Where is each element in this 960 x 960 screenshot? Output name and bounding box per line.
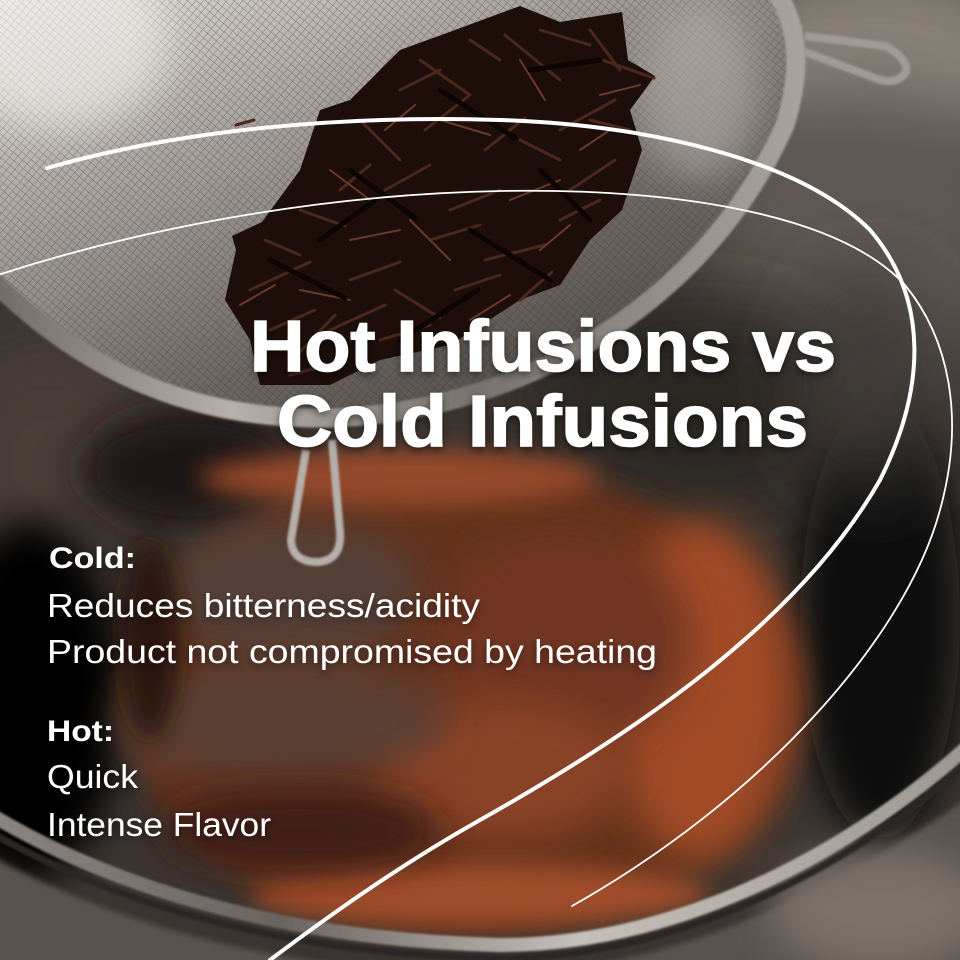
text block: cold benefits: Reduces bitterness/acidity (47, 587, 481, 624)
text block: hot benefits: Quick (47, 758, 139, 795)
tea leaves (225, 6, 655, 385)
title: Cold Infusions (277, 382, 808, 462)
text block: cold benefits (47, 542, 657, 670)
title: Hot Infusions vs (250, 307, 836, 387)
text block: cold benefits: Product not compromised by heating (47, 633, 657, 670)
pot rim (0, 735, 960, 945)
strainer right handle (805, 36, 906, 81)
strainer rim (0, 0, 796, 418)
text block: hot benefits (47, 715, 271, 843)
title (250, 307, 836, 462)
outside of pot below rim (0, 790, 960, 960)
decorative white curve: thin swoosh (0, 191, 952, 906)
text block: hot benefits: Hot: (47, 715, 114, 748)
brewed liquid (125, 465, 805, 935)
strainer bowl (0, 0, 791, 415)
strainer loop handle bottom (291, 440, 340, 562)
decorative white curve: thick swoosh (47, 119, 914, 960)
text block: hot benefits: Intense Flavor (47, 806, 271, 843)
text block: cold benefits: Cold: (49, 542, 136, 575)
